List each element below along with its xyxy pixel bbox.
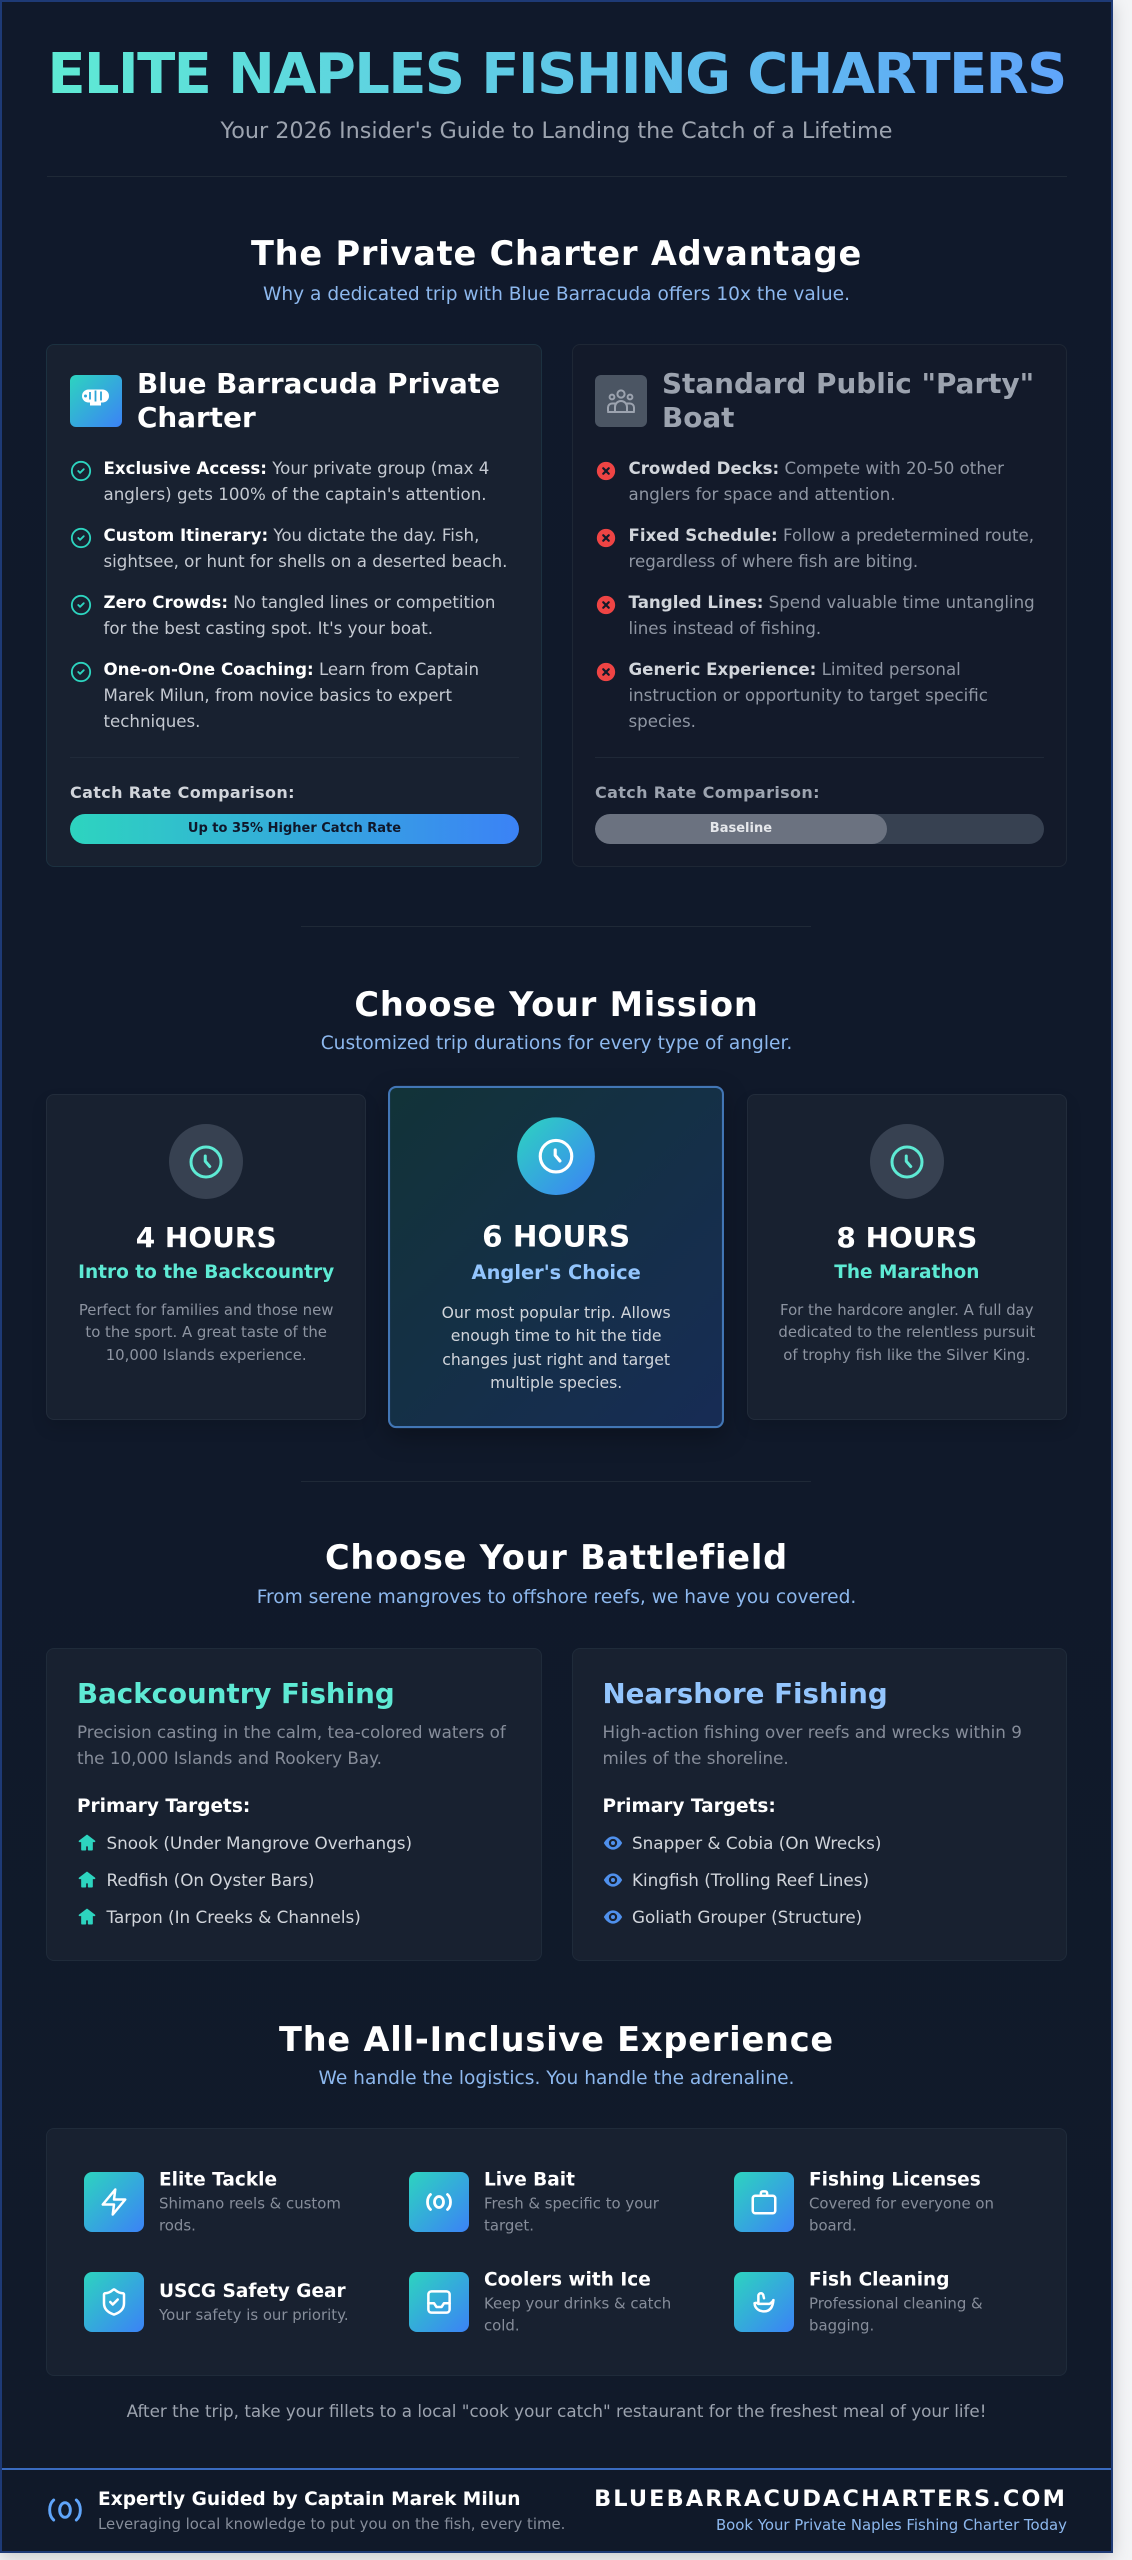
text: 6 hour description: enough time to hit the tide: [451, 1327, 662, 1346]
heading: private charter advantage: The Private Charter Advantage: [251, 234, 862, 273]
list: party boat drawbacks: instruction or opportunity to target specific: [628, 686, 988, 705]
list: party boat drawbacks: Generic Experience: Limited personal: [628, 660, 961, 679]
item: coolers with ice: [409, 2269, 671, 2334]
text: 4 hour description: 10,000 Islands experience.: [106, 1346, 307, 1364]
checklist: private charter benefits: anglers) gets 100% of the captain's attention.: [104, 485, 487, 504]
icon: tray: [409, 2272, 469, 2332]
label: 8 hours: 8 HOURS: [836, 1221, 977, 1254]
subheading: battlefield: From serene mangroves to offshore reefs, we have you covered.: [257, 1587, 856, 1608]
label: 6 hours: 6 HOURS: [482, 1219, 630, 1254]
text: backcountry description: the 10,000 Islands and Rookery Bay.: [77, 1748, 382, 1768]
list: party boat drawbacks: regardless of where fish are biting.: [628, 552, 918, 571]
checklist: private charter benefits: One-on-One Coaching: Learn from Captain: [104, 660, 479, 679]
text: coolers with ice: cold.: [484, 2316, 520, 2334]
icon: footer radio: [48, 2498, 82, 2522]
text: live bait: target.: [484, 2216, 534, 2234]
panel: standard public party boat: [572, 344, 1067, 867]
checklist: private charter benefits: Custom Itinerary: You dictate the day. Fish,: [104, 526, 479, 545]
label: 4 hours: 4 HOURS: [136, 1221, 277, 1254]
label: intro to backcountry: Intro to the Backcountry: [78, 1262, 334, 1283]
panel: blue barracuda private charter: [46, 344, 542, 867]
text: elite tackle: rods.: [159, 2216, 196, 2234]
list: party boat drawbacks: anglers for space and attention.: [628, 485, 896, 504]
item: live bait: [409, 2169, 659, 2234]
text: fishing licenses: Fishing Licenses: [809, 2169, 981, 2190]
heading: party boat: [662, 367, 1034, 434]
list: nearshore targets: Goliath Grouper (Structure): [632, 1907, 862, 1927]
checklist: private charter benefits: Marek Milun, from novice basics to expert: [104, 686, 452, 705]
bar: public catch rate: Baseline: [710, 821, 772, 836]
heading: private charter: Charter: [137, 401, 256, 434]
label: the marathon: The Marathon: [834, 1262, 979, 1283]
heading: private charter: Blue Barracuda Private: [137, 367, 500, 400]
card: 4 hours: [46, 1094, 366, 1420]
item: fish cleaning: [734, 2269, 983, 2334]
icon: clock 8 hours: [870, 1124, 944, 1199]
checklist: private charter benefits: for the best casting spot. It's your boat.: [104, 619, 433, 638]
heading: party boat: Boat: [662, 401, 734, 434]
list: backcountry targets: Snook (Under Mangrove Overhangs): [106, 1833, 412, 1853]
label: angler's choice: Angler's Choice: [472, 1262, 641, 1284]
text: uscg safety gear: USCG Safety Gear: [159, 2280, 346, 2301]
icon: clock 4 hours: [169, 1124, 243, 1199]
subheading: advantage: Why a dedicated trip with Blue Barracuda offers 10x the value.: [263, 284, 850, 305]
list: backcountry targets: Redfish (On Oyster Bars): [106, 1870, 314, 1890]
bar: private catch rate: [70, 814, 519, 844]
text: live bait: [484, 2169, 659, 2234]
footer: [0, 2468, 1113, 2553]
text: nearshore description: miles of the shoreline.: [602, 1748, 789, 1768]
checklist: private charter benefits: Zero Crowds: No tangled lines or competition: [104, 593, 495, 612]
text: 6 hour description: multiple species.: [490, 1374, 623, 1393]
item: elite tackle: [84, 2169, 341, 2234]
heading: all-inclusive experience: The All-Inclusive Experience: [279, 2020, 834, 2059]
heading: backcountry: Backcountry Fishing: [77, 1677, 395, 1710]
icon: clock 6 hours: [518, 1117, 595, 1195]
text: fish cleaning: bagging.: [809, 2316, 874, 2334]
checklist: private charter benefits: techniques.: [104, 712, 200, 731]
panel: backcountry fishing: [46, 1648, 542, 1961]
item: uscg safety gear: [84, 2272, 349, 2332]
heading: party boat: Standard Public "Party": [662, 367, 1034, 400]
checklist: private charter benefits: sightsee, or hunt for shells on a deserted beach.: [104, 552, 507, 571]
text: 8 hour description: [778, 1301, 1035, 1364]
text: fish cleaning: Professional cleaning &: [809, 2294, 983, 2312]
footer captain credit: Expertly Guided by Captain Marek Milun: [98, 2489, 521, 2510]
icon: private charter badge: [70, 375, 122, 427]
list: backcountry targets: [78, 1833, 412, 1927]
icon: cleaning basin: [734, 2272, 794, 2332]
label: primary targets backcountry: Primary Targets:: [77, 1796, 250, 1817]
text: backcountry description: Precision casting in the calm, tea-colored waters of: [77, 1722, 506, 1742]
list: nearshore targets: Snapper & Cobia (On Wrecks): [632, 1833, 881, 1853]
checklist: private charter benefits: [70, 459, 507, 731]
subheading: all-inclusive: We handle the logistics. You handle the adrenaline.: [319, 2068, 794, 2089]
text: 8 hour description: of trophy fish like the Silver King.: [783, 1346, 1030, 1364]
text: 4 hour description: Perfect for families and those new: [79, 1301, 333, 1319]
heading: choose your battlefield: Choose Your Battlefield: [325, 1538, 788, 1577]
text: live bait: Live Bait: [484, 2169, 575, 2190]
icon: shield: [84, 2272, 144, 2332]
label: primary targets nearshore: Primary Targets:: [602, 1796, 776, 1817]
bar: private catch rate: Up to 35% Higher Catch Rate: [188, 821, 401, 836]
list: backcountry targets: Tarpon (In Creeks & Channels): [106, 1907, 361, 1927]
closing note: After the trip, take your fillets to a local "cook your catch" restaurant for the freshest meal of your life!: [127, 2401, 986, 2421]
label: catch rate private: Catch Rate Comparison:: [70, 783, 295, 802]
heading: private charter: [137, 367, 500, 434]
list: party boat drawbacks: Crowded Decks: Compete with 20-50 other: [628, 459, 1004, 478]
text: 6 hour description: changes just right and target: [443, 1350, 670, 1369]
text: uscg safety gear: [159, 2280, 349, 2323]
text: elite tackle: [159, 2169, 341, 2234]
text: coolers with ice: [484, 2269, 671, 2334]
footer website: BLUEBARRACUDACHARTERS.COM: [594, 2486, 1067, 2512]
text: nearshore description: High-action fishing over reefs and wrecks within 9: [602, 1722, 1022, 1742]
icon: bolt: [84, 2172, 144, 2232]
list: party boat drawbacks: [596, 459, 1035, 731]
text: 8 hour description: For the hardcore angler. A full day: [780, 1301, 1034, 1319]
list: nearshore targets: [604, 1833, 881, 1927]
text: live bait: Fresh & specific to your: [484, 2194, 659, 2212]
list: party boat drawbacks: Tangled Lines: Spend valuable time untangling: [628, 593, 1035, 612]
text: fish cleaning: Fish Cleaning: [809, 2269, 949, 2290]
subheading: mission: Customized trip durations for every type of angler.: [321, 1033, 792, 1054]
text: 6 hour description: [442, 1303, 671, 1393]
heading: nearshore: Nearshore Fishing: [602, 1677, 888, 1710]
item: fishing licenses: [734, 2169, 994, 2234]
text: fishing licenses: [809, 2169, 994, 2234]
panel: nearshore fishing: [572, 1648, 1067, 1961]
footer call to action: Book Your Private Naples Fishing Charter Today: [716, 2516, 1067, 2534]
card: 6 hours featured: [388, 1086, 725, 1428]
bar: public catch rate: [595, 814, 1044, 844]
subtitle: Your 2026 Insider's Guide to Landing the Catch of a Lifetime: [221, 118, 892, 144]
text: elite tackle: Shimano reels & custom: [159, 2194, 341, 2212]
text: 8 hour description: dedicated to the relentless pursuit: [778, 1323, 1035, 1341]
text: coolers with ice: Keep your drinks & catch: [484, 2294, 671, 2312]
text: fish cleaning: [809, 2269, 983, 2334]
text: elite tackle: Elite Tackle: [159, 2169, 277, 2190]
text: fishing licenses: board.: [809, 2216, 857, 2234]
list: party boat drawbacks: species.: [628, 712, 696, 731]
text: 4 hour description: [79, 1301, 333, 1364]
text: fishing licenses: Covered for everyone on: [809, 2194, 994, 2212]
icon: briefcase: [734, 2172, 794, 2232]
panel: all-inclusive items: [46, 2128, 1067, 2376]
icon: party boat group: [595, 375, 647, 427]
text: nearshore description: [602, 1722, 1022, 1768]
footer tagline: Leveraging local knowledge to put you on the fish, every time.: [98, 2515, 565, 2533]
text: coolers with ice: Coolers with Ice: [484, 2269, 651, 2290]
card: 8 hours: [747, 1094, 1067, 1420]
list: party boat drawbacks: Fixed Schedule: Follow a predetermined route,: [628, 526, 1034, 545]
title: ELITE NAPLES FISHING CHARTERS: [47, 42, 1066, 107]
icon: radio: [409, 2172, 469, 2232]
label: catch rate public: Catch Rate Comparison:: [595, 783, 820, 802]
text: 6 hour description: Our most popular trip. Allows: [442, 1303, 671, 1322]
heading: choose your mission: Choose Your Mission: [354, 985, 759, 1024]
text: uscg safety gear: Your safety is our priority.: [159, 2305, 349, 2323]
checklist: private charter benefits: Exclusive Access: Your private group (max 4: [104, 459, 489, 478]
text: backcountry description: [77, 1722, 506, 1768]
list: nearshore targets: Kingfish (Trolling Reef Lines): [632, 1870, 869, 1890]
text: 4 hour description: to the sport. A great taste of the: [85, 1323, 327, 1341]
list: party boat drawbacks: lines instead of fishing.: [628, 619, 821, 638]
